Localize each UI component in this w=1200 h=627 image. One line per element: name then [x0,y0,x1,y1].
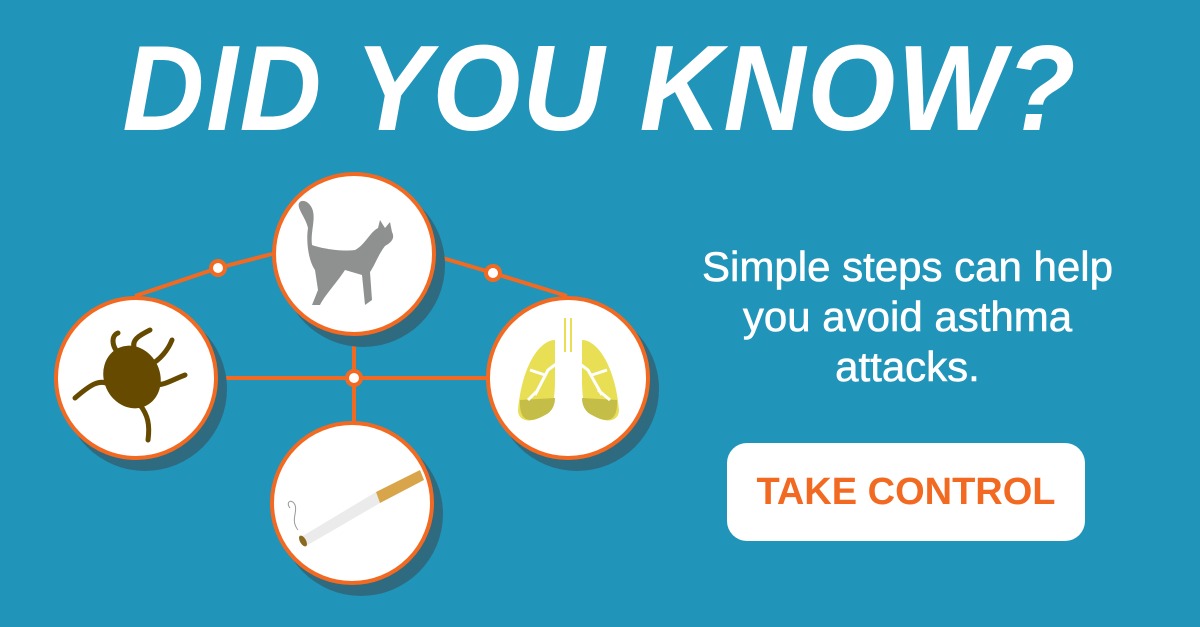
button: take control [727,443,1085,541]
circle: lungs [488,298,659,471]
connector nodes [211,261,500,385]
message text: attacks. [835,343,980,390]
button: take control: TAKE CONTROL [756,471,1056,513]
circle: dust mite [56,298,227,471]
message text [702,243,1113,390]
circle: cigarette [272,423,443,596]
title: DID YOU KNOW? [122,20,1077,156]
message text: Simple steps can help [702,243,1113,290]
message text: you avoid asthma [743,293,1072,340]
circle: cat [274,174,445,347]
